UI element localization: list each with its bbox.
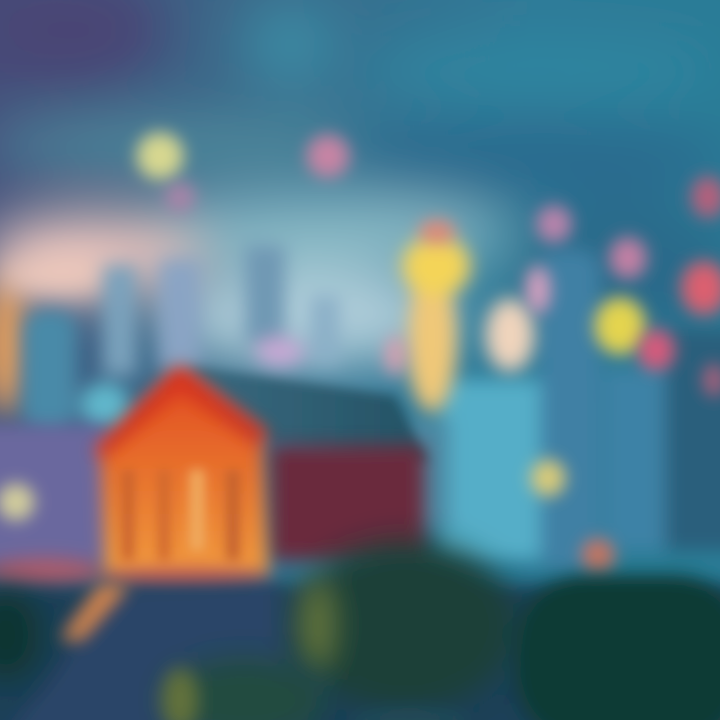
left purple building [0, 425, 110, 586]
lanterns [137, 133, 720, 396]
sky clouds and horizon glow [0, 0, 720, 415]
house roof [185, 365, 430, 462]
house columns [122, 470, 240, 560]
house gable [94, 364, 268, 458]
distant skyline [22, 245, 340, 430]
house front [100, 372, 268, 575]
glowing tower [385, 220, 550, 412]
house side wall [270, 445, 425, 560]
trees [0, 540, 720, 720]
right towers [400, 250, 720, 571]
house [94, 364, 430, 587]
hill and path [0, 585, 720, 720]
